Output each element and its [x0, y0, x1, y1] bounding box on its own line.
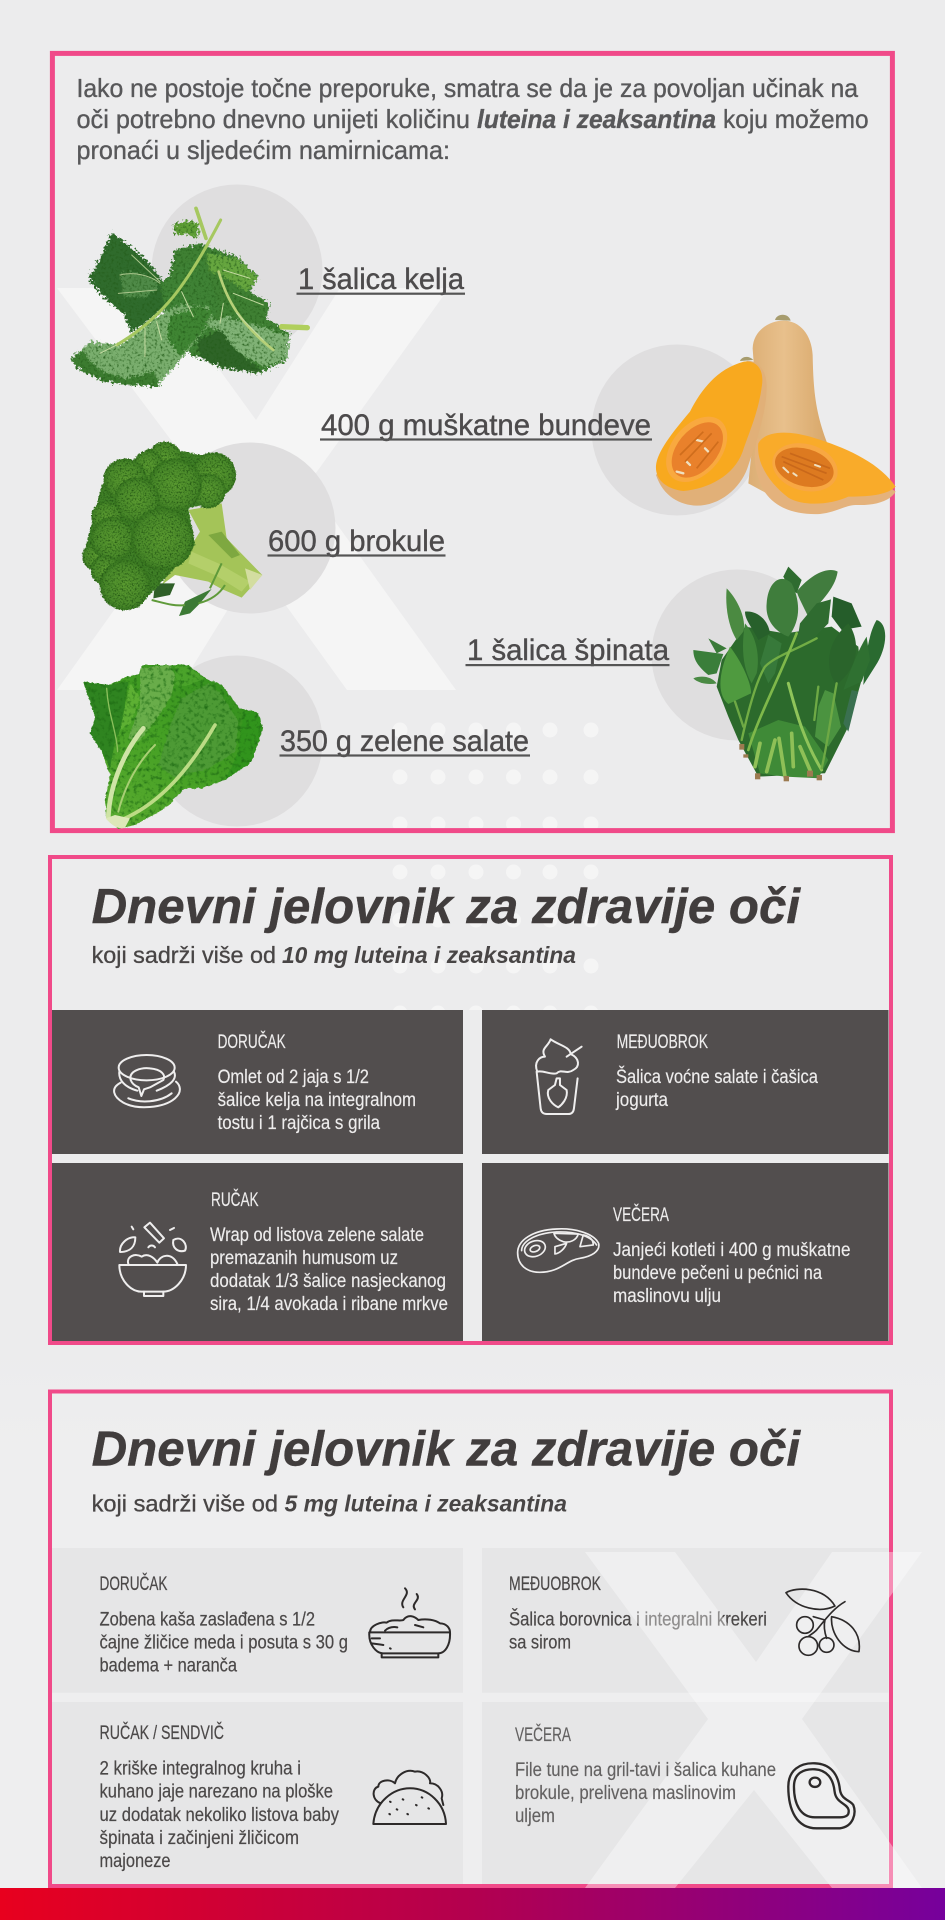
card text: bundeve pečeni u pećnici na [613, 1263, 822, 1284]
label: lettuce: 350 g zelene salate [280, 725, 529, 758]
card text: dinner: uljem [515, 1806, 555, 1827]
card text: 2 kriške integralnog kruha i [100, 1759, 301, 1780]
card text: Janjeći kotleti i 400 g muškatne [613, 1240, 850, 1261]
card text: Zobena kaša zaslađena s 1/2 [100, 1610, 315, 1630]
card text: dinner: VEČERA [515, 1724, 571, 1746]
panel frame [50, 1392, 891, 1886]
subheading [92, 1491, 567, 1517]
card text: Šalica borovnica i integralni krekeri [509, 1608, 767, 1630]
circle behind broccoli [164, 442, 336, 614]
card text: MEĐUOBROK [509, 1574, 601, 1595]
card: dinner [482, 1163, 888, 1341]
bottom gradient bar [0, 1888, 945, 1920]
card text: tostu i 1 rajčica s grila [218, 1113, 380, 1134]
card text: dinner: brokule, prelivena maslinovim [515, 1783, 736, 1804]
card text: šalice kelja na integralnom [218, 1090, 416, 1111]
label: broccoli: 600 g brokule [268, 525, 445, 558]
panel: foods rich in lutein and zeaxanthin [52, 53, 896, 831]
panel: daily menu with more than 5 mg [50, 1392, 922, 1888]
icon: taco [373, 1771, 446, 1824]
icon: tuna steak [788, 1763, 854, 1828]
card text: DORUČAK [218, 1031, 286, 1053]
subheading: koji sadrži više od [92, 1491, 278, 1517]
icon: lamb chop [518, 1229, 599, 1272]
card text [100, 1722, 339, 1872]
card background: dinner [482, 1702, 888, 1884]
card text: VEČERA [613, 1204, 669, 1226]
subheading [92, 942, 576, 968]
card: lunch or sandwich [52, 1702, 463, 1884]
intro text: oči potrebno dnevno unijeti količinu [76, 104, 470, 134]
card text: dinner: File tune na gril-tavi i šalica kuhane [515, 1760, 776, 1781]
card text: RUČAK [211, 1189, 259, 1211]
card text: Šalica voćne salate i čašica [616, 1066, 818, 1088]
card: lunch [52, 1163, 463, 1341]
circle behind kale [152, 184, 322, 356]
card text: RUČAK / SENDVIČ [100, 1722, 224, 1744]
card text: sa sirom [509, 1633, 571, 1654]
circle behind spinach [652, 570, 822, 740]
circle behind squash [592, 344, 762, 516]
card: snack [482, 1010, 888, 1154]
card text: uz dodatak nekoliko listova baby [100, 1805, 339, 1826]
card text: jogurta [615, 1090, 668, 1111]
panel frame [50, 857, 891, 1343]
card text [509, 1574, 767, 1654]
heading: Dnevni jelovnik za zdravije oči [92, 1422, 801, 1476]
card text [613, 1204, 850, 1307]
heading: Dnevni jelovnik za zdravije oči [92, 880, 801, 934]
icon: berries with leaves [786, 1589, 859, 1655]
card text: dodatak 1/3 šalice nasjeckanog [210, 1271, 446, 1292]
label: spinach: 1 šalica špinata [467, 634, 669, 667]
card text: Wrap od listova zelene salate [210, 1225, 424, 1246]
card text: kuhano jaje narezano na ploške [100, 1782, 333, 1803]
card text [615, 1032, 818, 1111]
food: spinach [693, 567, 885, 781]
intro text [76, 73, 869, 165]
food: romaine lettuce [83, 665, 263, 829]
card text: dinner [515, 1724, 776, 1827]
card text: badema + naranča [100, 1656, 237, 1677]
panel: daily menu with more than 10 mg [50, 857, 891, 1343]
card text: DORUČAK [100, 1573, 168, 1595]
intro text: luteina i zeaksantina [477, 104, 716, 134]
intro text: Iako ne postoje točne preporuke, smatra se da je za povoljan učinak na [76, 73, 859, 103]
card: breakfast [52, 1548, 463, 1693]
card text: maslinovu ulju [613, 1286, 721, 1307]
card text: majoneze [100, 1851, 170, 1872]
subheading: koji sadrži više od [92, 942, 276, 968]
icon: porridge bowl [369, 1588, 450, 1657]
icon: pancakes [114, 1055, 180, 1107]
food: butternut squash [654, 315, 896, 514]
card text: MEĐUOBROK [617, 1032, 708, 1053]
card: snack [482, 1548, 888, 1693]
card text [218, 1031, 416, 1134]
card text: čajne žličice meda i posuta s 30 g [100, 1633, 348, 1654]
card text: špinata i začinjeni žličicom [100, 1828, 299, 1849]
card text [210, 1189, 448, 1315]
food: broccoli [82, 442, 262, 616]
card text [100, 1573, 348, 1677]
intro text: koju možemo [723, 104, 869, 134]
icon: salad bowl [119, 1223, 186, 1296]
food: kale [70, 208, 307, 387]
card text: sira, 1/4 avokada i ribane mrkve [210, 1294, 448, 1315]
label: kale: 1 šalica kelja [298, 263, 464, 296]
label: squash: 400 g muškatne bundeve [321, 409, 651, 442]
card text: premazanih humusom uz [210, 1248, 398, 1269]
icon: smoothie cup [536, 1039, 582, 1114]
panel frame [52, 53, 892, 831]
card: breakfast [52, 1010, 463, 1154]
subheading: 10 mg luteina i zeaksantina [282, 942, 576, 968]
subheading: 5 mg luteina i zeaksantina [284, 1491, 567, 1517]
circle behind lettuce [152, 656, 322, 826]
intro text: pronaći u sljedećim namirnicama: [76, 135, 450, 165]
card text: Omlet od 2 jaja s 1/2 [218, 1067, 369, 1088]
